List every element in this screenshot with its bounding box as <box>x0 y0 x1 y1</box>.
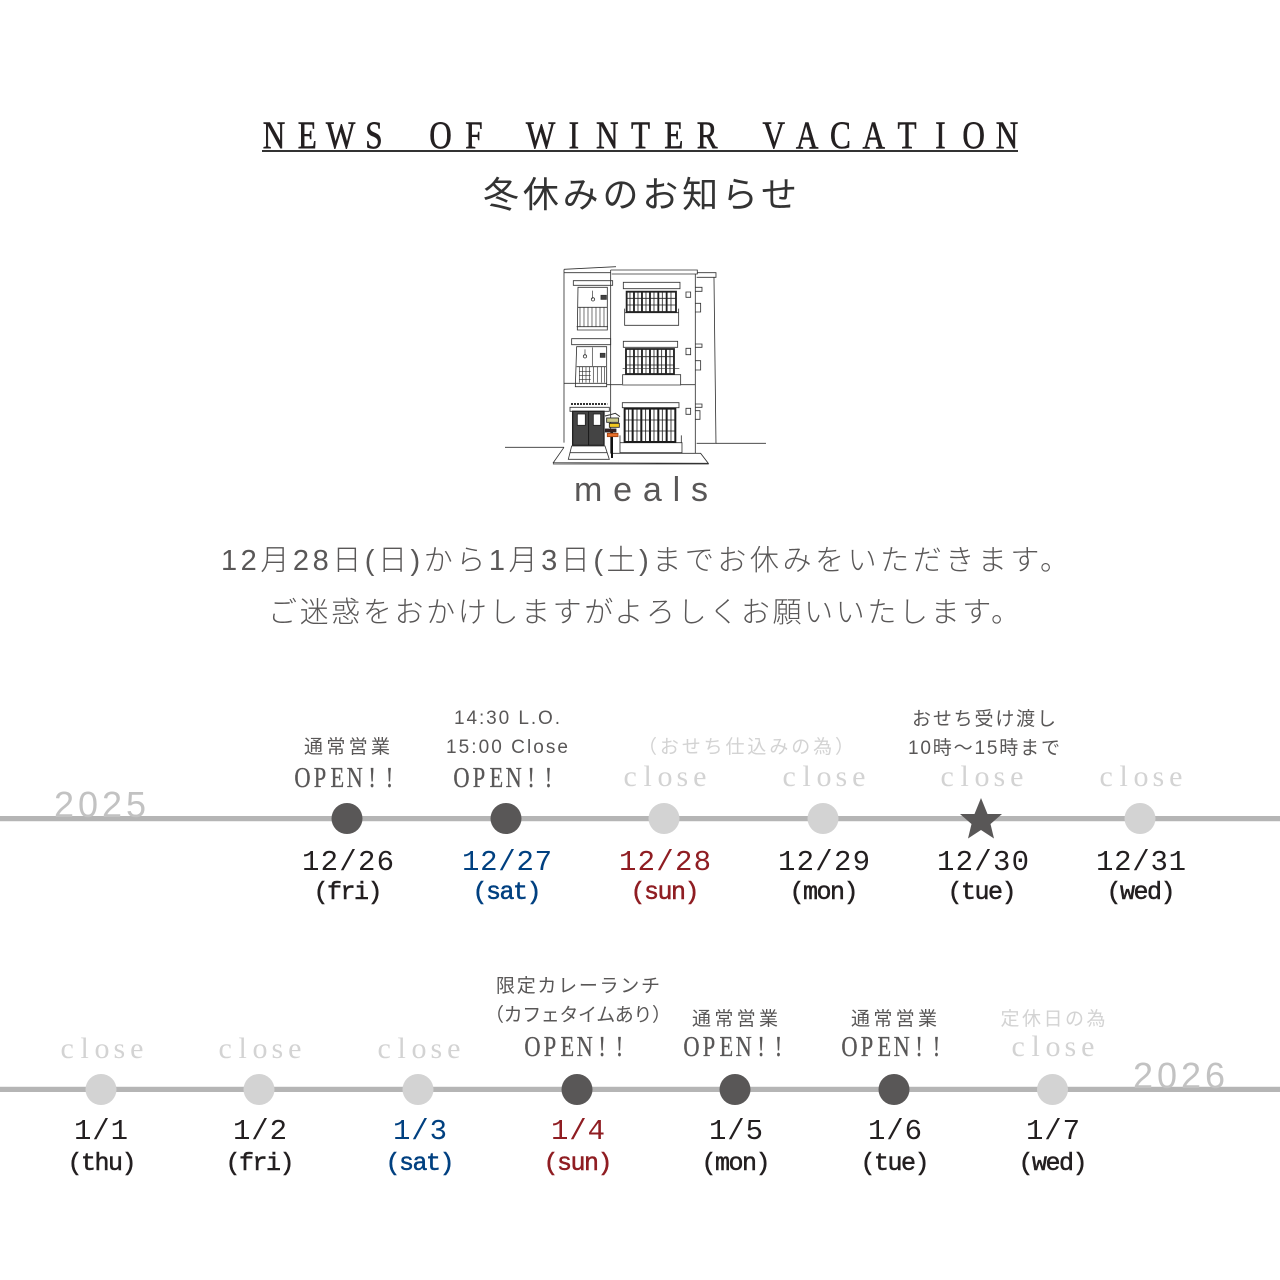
note: osechi preparation: （おせち仕込みの為） <box>638 736 854 758</box>
day: 12/31 <box>1096 760 1186 907</box>
day: 1/2 <box>219 1032 301 1178</box>
day: 12/28: 12/28 <box>619 846 711 879</box>
day: 12/30: 10時～15時まで <box>908 737 1060 759</box>
day: 1/4 <box>485 975 671 1178</box>
day: 1/4: OPEN!! <box>524 1032 623 1063</box>
icon: building illustration <box>505 267 766 464</box>
day: 12/30 <box>908 708 1060 907</box>
day: 1/2: 1/2 <box>233 1115 287 1148</box>
day: 1/7: (wed) <box>1018 1149 1088 1178</box>
day: 1/4: (sun) <box>544 1149 612 1178</box>
day: 1/5: (mon) <box>702 1149 770 1178</box>
message text: ご迷惑をおかけしますがよろしくお願いいたします。 <box>268 596 1020 629</box>
day: 12/30: おせち受け渡し <box>912 708 1056 730</box>
day: 12/27: (sat) <box>472 878 542 907</box>
message text: 12月28日(日)から1月3日(土)までお休みをいただきます。 <box>221 545 1069 577</box>
day: 12/28 <box>619 760 711 907</box>
day: 12/29: close <box>783 760 865 793</box>
title: NEWS OF WINTER VACATION <box>263 114 1018 157</box>
day: 1/3: close <box>378 1032 460 1065</box>
day: 1/7 <box>1000 1008 1106 1178</box>
day: 1/5 <box>683 1008 782 1178</box>
day: 12/29: 12/29 <box>778 846 870 879</box>
upper left balcony <box>573 281 613 330</box>
day: 1/5: 通常営業 <box>692 1008 778 1030</box>
year label 2026: 2026 <box>1133 1055 1225 1096</box>
day: 12/29: (mon) <box>790 878 858 907</box>
middle left balcony <box>572 339 611 387</box>
icon: star <box>960 798 1002 838</box>
ground right window <box>620 403 682 453</box>
day: 12/27: 14:30 L.O. <box>454 708 560 729</box>
day: 1/6: OPEN!! <box>841 1032 940 1063</box>
day: 12/30: 12/30 <box>937 846 1029 879</box>
day: 1/1 <box>61 1032 143 1178</box>
day: 12/26: 12/26 <box>302 846 394 879</box>
door <box>570 407 609 411</box>
day: 1/2: close <box>219 1032 301 1065</box>
day: 1/4: （カフェタイムあり） <box>485 1004 671 1026</box>
day: 1/4: 1/4 <box>551 1115 605 1148</box>
day: 12/26 <box>294 736 394 907</box>
day: 1/6: (tue) <box>860 1149 930 1178</box>
day: 1/1: close <box>61 1032 143 1065</box>
day: 12/30: (tue) <box>948 878 1016 907</box>
day: 1/3: (sat) <box>386 1149 454 1178</box>
brand name: meals <box>574 471 708 509</box>
year label 2025: 2025 <box>54 784 146 825</box>
day: 1/7: close <box>1012 1030 1094 1063</box>
day: 1/1: 1/1 <box>74 1115 128 1148</box>
day: 12/26: 通常営業 <box>304 736 390 758</box>
day: 1/4: 限定カレーランチ <box>496 975 660 997</box>
day: 1/6 <box>841 1008 940 1178</box>
day: 12/28: close <box>624 760 706 793</box>
subtitle: 冬休みのお知らせ <box>483 174 797 215</box>
middle right window <box>623 341 681 385</box>
day: 12/26: (fri) <box>314 878 382 907</box>
day: 12/29 <box>778 760 870 907</box>
day: 12/27: 12/27 <box>462 846 552 879</box>
message text <box>221 545 1069 629</box>
day: 1/6: 1/6 <box>868 1115 922 1148</box>
day: 1/1: (thu) <box>68 1149 136 1178</box>
day: 12/27: 15:00 Close <box>446 737 568 758</box>
day: 12/30: close <box>941 760 1023 793</box>
day: 12/27: OPEN!! <box>453 763 552 794</box>
day: 1/7: 定休日の為 <box>1000 1008 1106 1030</box>
day: 1/3: 1/3 <box>393 1115 447 1148</box>
day: 1/3 <box>378 1032 460 1178</box>
day: 12/26: OPEN!! <box>294 763 393 794</box>
timeline: 2025 <box>0 708 1280 907</box>
steps and pavement <box>568 446 609 459</box>
timeline: 2026 <box>0 975 1280 1178</box>
sign post <box>609 430 615 458</box>
day: 1/6: 通常営業 <box>851 1008 937 1030</box>
day: 1/5: 1/5 <box>709 1115 763 1148</box>
day: 12/31: close <box>1100 760 1182 793</box>
day: 1/2: (fri) <box>226 1149 294 1178</box>
upper right window <box>623 282 680 325</box>
day: 1/5: OPEN!! <box>683 1032 782 1063</box>
day: 12/31: (wed) <box>1106 878 1176 907</box>
day: 12/27 <box>446 708 568 907</box>
day: 12/28: (sun) <box>630 878 700 907</box>
day: 12/31: 12/31 <box>1096 846 1186 879</box>
day: 1/7: 1/7 <box>1026 1115 1080 1148</box>
